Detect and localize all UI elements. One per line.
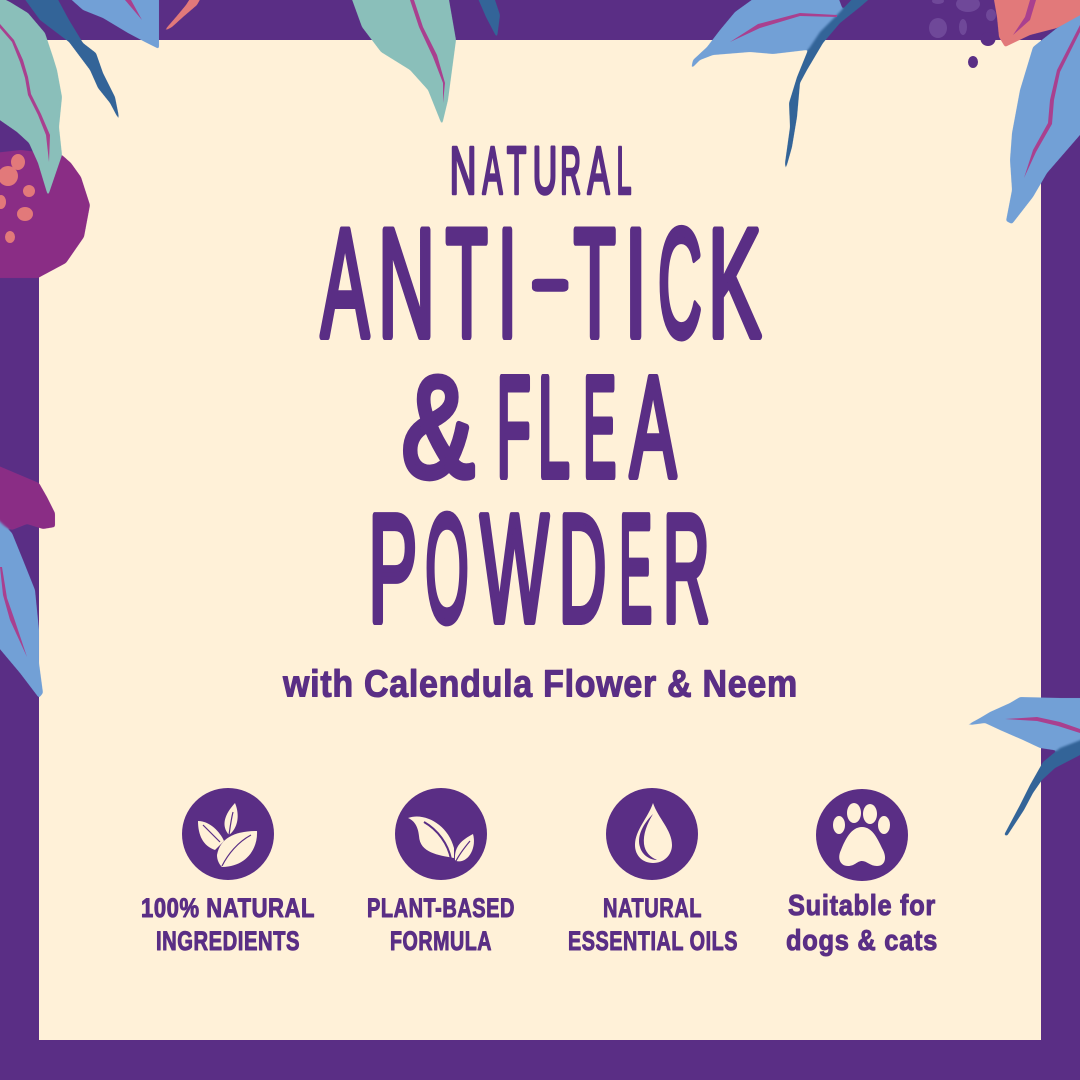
heading: NATURAL: T (507, 133, 526, 208)
text: L (617, 133, 631, 208)
heading: POWDER: O (425, 483, 469, 654)
heading: ANTI-TICK: A (321, 197, 369, 369)
heading: NATURAL: R (560, 133, 581, 208)
heading: ANTI-TICK: T (446, 197, 488, 369)
heading: POWDER: E (619, 483, 652, 654)
feature: natural essential oils (568, 788, 738, 956)
heading: & FLEA: L (538, 348, 570, 507)
feature: plant-based formula (367, 788, 515, 956)
label: plant-based formula: PLANT-BASED (367, 893, 515, 923)
icon: paw print (816, 789, 908, 881)
label: suitable for dogs and cats (786, 890, 938, 957)
heading: NATURAL: U (533, 133, 557, 208)
label: natural essential oils (568, 893, 738, 956)
heading: ANTI-TICK: I (498, 197, 517, 369)
decoration: top-right foliage (691, 0, 1080, 224)
label: plant-based formula (367, 893, 515, 956)
decoration: right-edge foliage (958, 697, 1080, 836)
text: R (663, 483, 710, 654)
heading: POWDER: W (480, 483, 549, 654)
label: suitable for dogs and cats: Suitable for (788, 890, 936, 922)
heading: ANTI-TICK: T (574, 197, 616, 369)
label: natural essential oils: ESSENTIAL OILS (568, 926, 738, 956)
decoration: top-left foliage (0, 0, 203, 278)
feature: suitable for dogs and cats (786, 789, 938, 957)
icon: oil drop (606, 788, 698, 880)
feature: 100% natural ingredients (141, 788, 315, 956)
heading: ANTI-TICK: N (378, 197, 435, 369)
heading: NATURAL: A (588, 133, 610, 208)
heading: NATURAL: A (482, 133, 503, 208)
icon: plant sprout (395, 788, 487, 880)
label: natural essential oils: NATURAL (603, 893, 702, 923)
decoration: top-centre leaf (350, 0, 500, 125)
heading: ANTI-TICK: K (708, 197, 761, 369)
label: 100% natural ingredients: 100% NATURAL (141, 893, 315, 923)
heading: & FLEA: F (497, 348, 531, 507)
label: 100% natural ingredients (141, 893, 315, 956)
heading: POWDER: P (368, 483, 417, 654)
heading: ANTI-TICK: I (625, 197, 647, 369)
heading: ANTI-TICK: C (658, 197, 702, 369)
subtitle: with Calendula Flower & Neem (282, 664, 798, 706)
icon: three leaves (182, 788, 274, 880)
heading: POWDER: D (559, 483, 606, 654)
label: 100% natural ingredients: INGREDIENTS (156, 926, 300, 956)
decoration: left-edge foliage (0, 464, 55, 698)
heading: NATURAL: N (450, 133, 476, 208)
label: plant-based formula: FORMULA (390, 926, 492, 956)
text: A (630, 348, 676, 507)
label: suitable for dogs and cats: dogs & cats (786, 925, 938, 957)
heading: & FLEA: & (402, 348, 474, 507)
heading: & FLEA: E (583, 348, 616, 507)
heading: ANTI-TICK: - (533, 241, 568, 319)
